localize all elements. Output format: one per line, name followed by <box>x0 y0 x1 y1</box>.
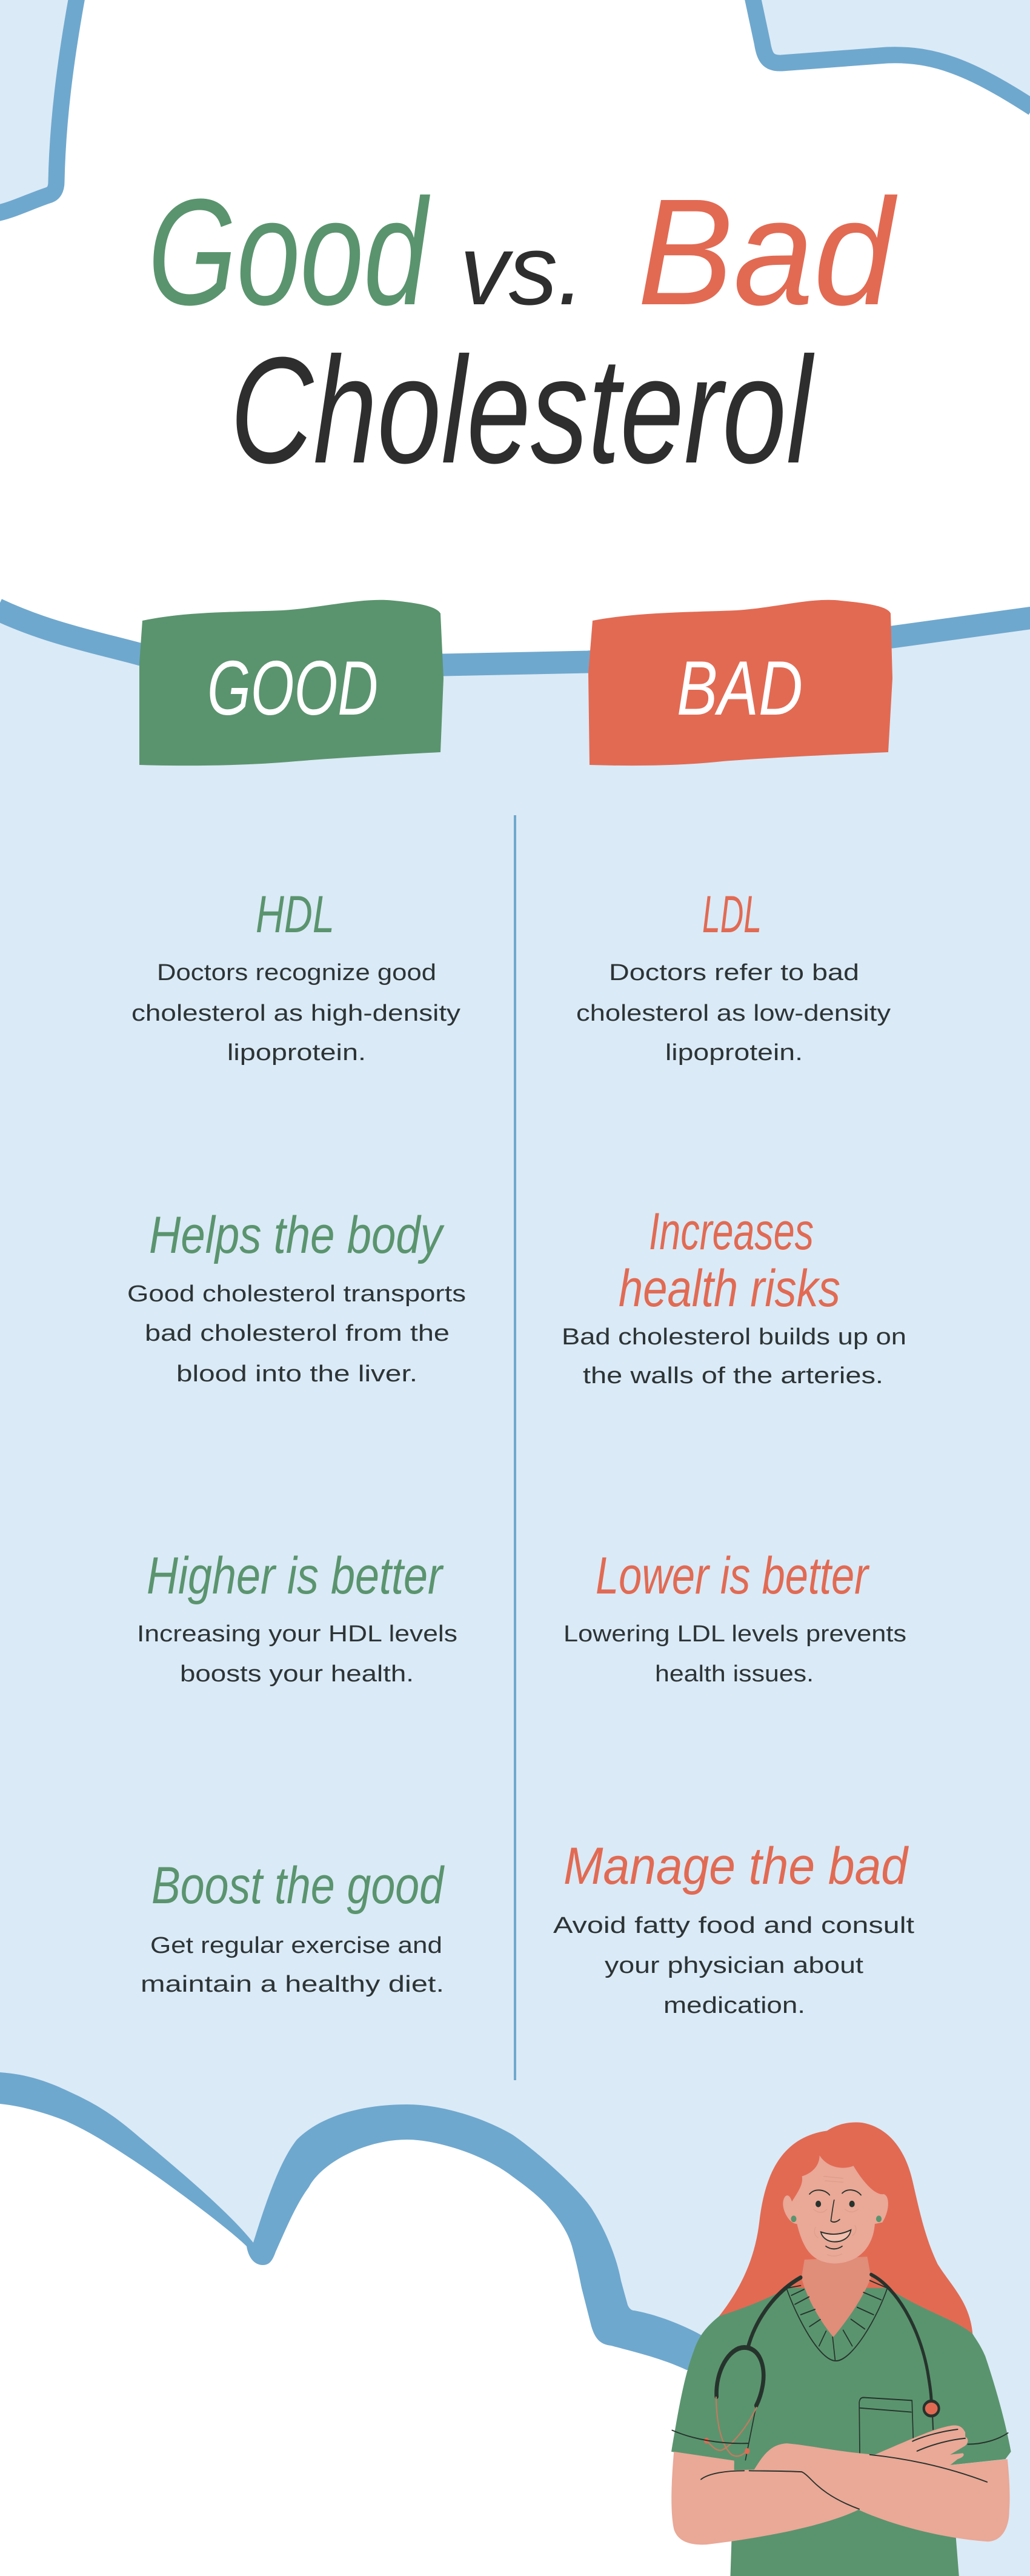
column divider <box>514 815 516 2080</box>
top left blue outline <box>0 0 77 213</box>
item: Boost the good: Boost the good <box>151 1857 445 1915</box>
top white blob <box>0 0 1030 662</box>
item: LDL: lipoprotein. <box>665 1040 803 1066</box>
item: Higher is better <box>137 1547 457 1687</box>
item: Lower is better: Lowering LDL levels prevents <box>563 1621 906 1647</box>
pocket <box>859 2397 913 2453</box>
GOOD banner: GOOD <box>207 645 378 731</box>
GOOD banner <box>139 600 444 766</box>
face <box>791 2177 882 2256</box>
scrubs <box>671 2288 1011 2576</box>
title word: Cholesterol: Cholesterol <box>230 325 815 495</box>
BAD banner: BAD <box>677 645 803 731</box>
item: LDL: LDL <box>702 886 762 944</box>
item: LDL <box>576 886 891 1066</box>
crossed arms <box>671 2426 1010 2544</box>
item: HDL: Doctors recognize good <box>157 960 436 986</box>
item: Increases health risks: health risks <box>619 1260 840 1318</box>
top right blue outline <box>753 0 1030 108</box>
item: Manage the bad: your physician about <box>605 1953 864 1978</box>
item: Helps the body: bad cholesterol from the <box>145 1321 450 1346</box>
item: HDL: cholesterol as high-density <box>131 1001 460 1026</box>
item: Increases health risks: Increases <box>649 1203 814 1261</box>
item: Manage the bad: Avoid fatty food and consult <box>553 1913 915 1938</box>
title word: Bad: Bad <box>637 167 898 336</box>
bottom white blob <box>0 2104 788 2576</box>
item: Manage the bad: medication. <box>663 1993 805 2018</box>
title word: vs.: vs. <box>460 214 585 325</box>
item: Increases health risks: Bad cholesterol builds up on <box>562 1324 906 1350</box>
title word: Good: Good <box>148 167 430 336</box>
item: Helps the body <box>127 1206 466 1387</box>
item: Manage the bad: Manage the bad <box>563 1837 909 1895</box>
item: Increases health risks: the walls of the arteries. <box>583 1363 883 1389</box>
item: Helps the body: blood into the liver. <box>176 1361 417 1387</box>
item: Lower is better <box>563 1547 906 1687</box>
item: Higher is better: Higher is better <box>147 1547 444 1605</box>
item: Lower is better: Lower is better <box>596 1547 870 1605</box>
hair <box>719 2122 973 2354</box>
item: LDL: cholesterol as low-density <box>576 1001 891 1026</box>
item: HDL: HDL <box>256 886 334 944</box>
BAD banner <box>588 600 892 766</box>
illustration: nurse with stethoscope <box>671 2122 1011 2576</box>
item: Lower is better: health issues. <box>655 1661 814 1687</box>
item: Helps the body: Helps the body <box>149 1206 445 1264</box>
item: Boost the good <box>141 1857 445 1997</box>
bottom blue outline <box>0 2072 727 2576</box>
item: Helps the body: Good cholesterol transports <box>127 1281 466 1307</box>
collar <box>787 2280 888 2361</box>
neck <box>802 2257 871 2337</box>
item: Manage the bad <box>553 1837 915 2018</box>
title <box>148 167 898 495</box>
item: HDL <box>131 886 460 1066</box>
item: Higher is better: boosts your health. <box>180 1661 414 1687</box>
item: Increases health risks <box>562 1203 906 1389</box>
item: LDL: Doctors refer to bad <box>609 960 859 986</box>
item: Boost the good: maintain a healthy diet. <box>141 1972 444 1997</box>
arm lines <box>701 2429 987 2509</box>
middle blue outline <box>0 609 1030 665</box>
stethoscope <box>704 2275 939 2460</box>
item: Higher is better: Increasing your HDL levels <box>137 1621 457 1647</box>
head <box>783 2155 888 2263</box>
item: Boost the good: Get regular exercise and <box>150 1933 442 1958</box>
sleeve hems <box>672 2431 1008 2444</box>
item: HDL: lipoprotein. <box>227 1040 366 1066</box>
